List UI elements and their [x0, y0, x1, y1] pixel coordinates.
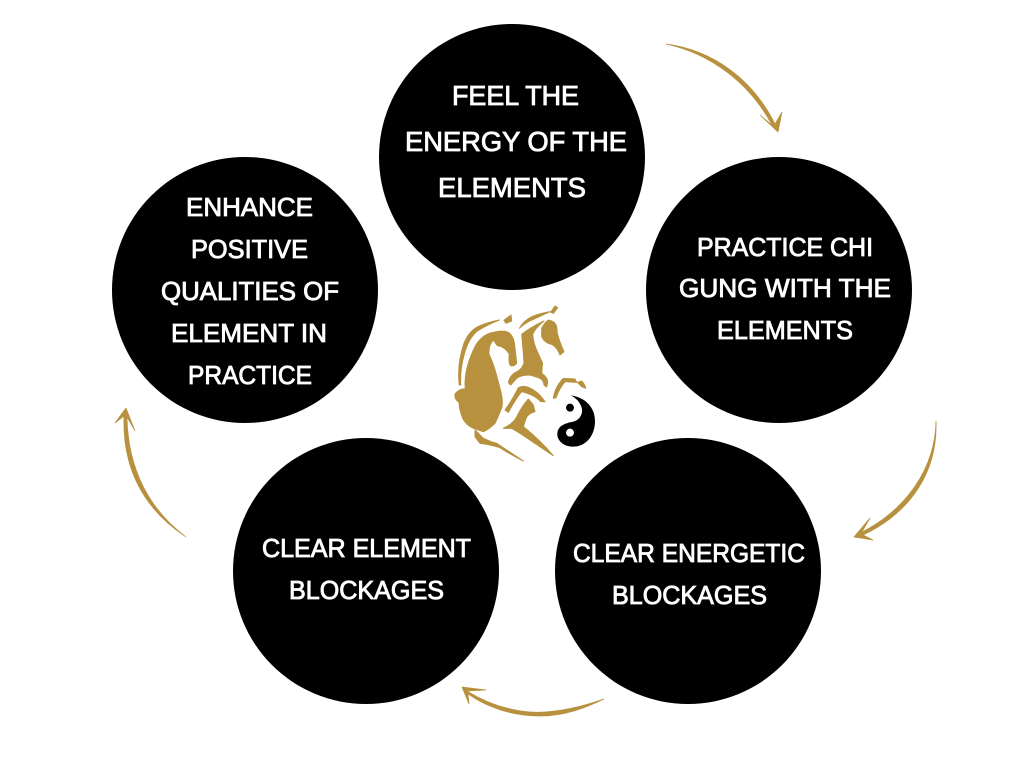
arrow: bottom right to bottom left	[462, 687, 604, 716]
panel: feel the energy: ELEMENTS	[438, 172, 586, 203]
panel: feel the energy: FEEL THE	[452, 80, 579, 111]
panel: enhance positive qualities: POSITIVE	[191, 236, 308, 264]
arrow: right to bottom right	[854, 421, 936, 540]
panel: clear energetic blockages: BLOCKAGES	[612, 582, 767, 610]
panel: clear energetic blockages: CLEAR ENERGETIC	[573, 540, 805, 568]
panel: practice chi gung: GUNG WITH THE	[679, 275, 891, 303]
panel: feel the energy	[379, 24, 645, 290]
icon: yin yang	[557, 395, 595, 447]
arrow: bottom left to left	[115, 408, 186, 537]
panel: clear element blockages	[233, 438, 499, 704]
panel: enhance positive qualities: ENHANCE	[186, 194, 313, 222]
arrow: top to right	[666, 44, 782, 132]
panel: enhance positive qualities: PRACTICE	[188, 362, 312, 390]
panel: clear energetic blockages	[555, 438, 821, 704]
panel: clear element blockages: BLOCKAGES	[289, 577, 444, 605]
panel: enhance positive qualities	[112, 157, 378, 423]
panel: practice chi gung	[646, 157, 912, 423]
panel: feel the energy: ENERGY OF THE	[405, 126, 627, 157]
panel: enhance positive qualities: ELEMENT IN	[171, 320, 327, 348]
panel: enhance positive qualities: QUALITIES OF	[161, 278, 339, 306]
panel: clear element blockages: CLEAR ELEMENT	[262, 535, 471, 563]
panel: practice chi gung: PRACTICE CHI	[697, 234, 873, 262]
panel: practice chi gung: ELEMENTS	[717, 317, 853, 345]
icon: horses and yin yang logo	[455, 306, 595, 461]
